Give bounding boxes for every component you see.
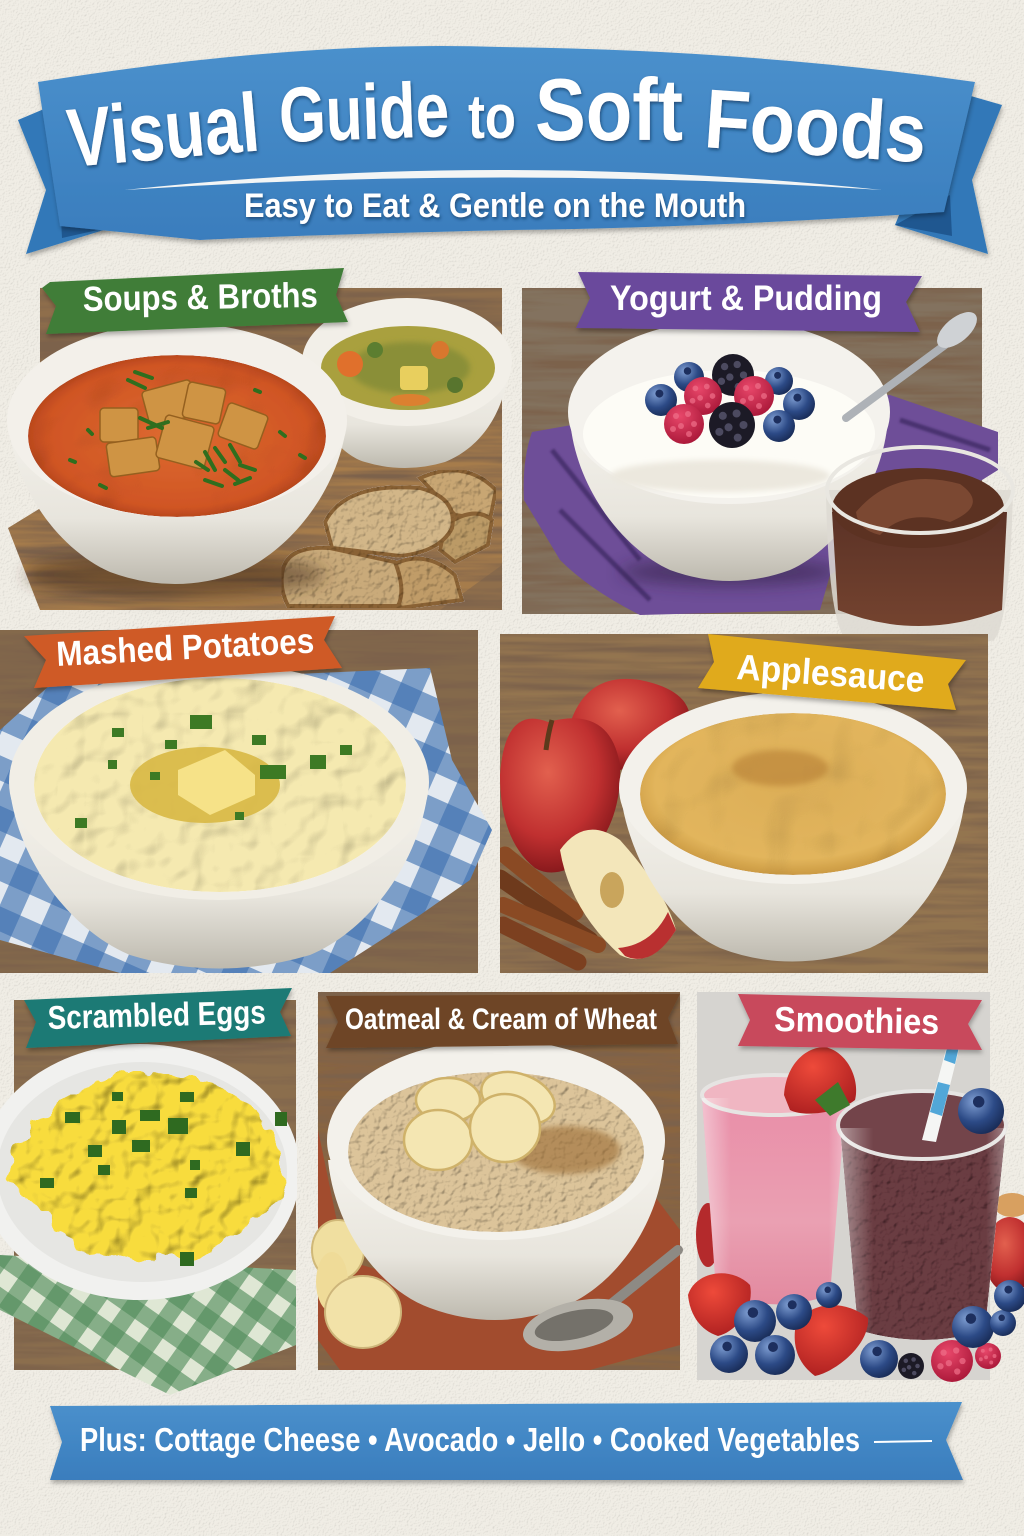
apples bbox=[500, 679, 690, 872]
bowl of yogurt and berries bbox=[568, 320, 890, 586]
bottom banner bbox=[50, 1402, 963, 1480]
pink smoothie glass bbox=[702, 1075, 846, 1304]
cinnamon sticks bbox=[500, 855, 598, 962]
label: yogurt and pudding bbox=[576, 272, 922, 332]
label: mashed potatoes: Mashed Potatoes bbox=[55, 622, 315, 674]
label: applesauce bbox=[698, 634, 966, 710]
title words: Foods bbox=[702, 71, 930, 180]
label: soups and broths: Soups & Broths bbox=[82, 276, 318, 319]
apple slice bbox=[560, 830, 676, 959]
berries at front bbox=[688, 1273, 1024, 1382]
title words: Soft bbox=[535, 60, 683, 159]
striped straw bbox=[922, 1034, 962, 1142]
subtitle: Easy to Eat & Gentle on the Mouth bbox=[244, 187, 746, 225]
bottom banner: Plus: Cottage Cheese • Avocado • Jello • Cooked Vegetables bbox=[80, 1421, 860, 1458]
panel: yogurt and pudding bbox=[522, 288, 1013, 651]
eggs bbox=[8, 1073, 287, 1266]
strawberry on glass bbox=[784, 1047, 856, 1116]
label: yogurt and pudding: Yogurt & Pudding bbox=[610, 279, 882, 318]
label: scrambled eggs bbox=[24, 988, 292, 1048]
panel: applesauce bbox=[500, 634, 988, 973]
banner tails bbox=[18, 90, 1002, 254]
large bowl of tomato soup bbox=[7, 323, 347, 597]
banner fold shadows bbox=[60, 195, 952, 238]
bowl of applesauce bbox=[619, 692, 967, 962]
panel: soups and broths bbox=[7, 288, 512, 610]
title words: Visual bbox=[63, 76, 263, 185]
white plate bbox=[0, 1044, 300, 1300]
side apples bbox=[696, 1193, 1024, 1293]
banner body bbox=[38, 46, 975, 240]
glass of chocolate pudding bbox=[826, 447, 1013, 651]
label: mashed potatoes bbox=[24, 616, 342, 688]
label: applesauce: Applesauce bbox=[735, 646, 926, 700]
label: soups and broths bbox=[42, 268, 348, 334]
blueberry on smoothie bbox=[958, 1088, 1004, 1134]
label: oatmeal and cream of wheat bbox=[326, 994, 680, 1048]
banana slices on table bbox=[312, 1220, 401, 1348]
title words bbox=[63, 60, 930, 185]
cutting board bbox=[8, 420, 502, 610]
panel: oatmeal and cream of wheat bbox=[312, 992, 680, 1370]
dark berry smoothie glass bbox=[838, 1091, 1006, 1340]
title banner bbox=[18, 46, 1002, 254]
panel: mashed potatoes bbox=[0, 630, 492, 973]
purple napkin bbox=[524, 395, 998, 615]
spoon bbox=[518, 1250, 678, 1360]
title words: Guide bbox=[278, 65, 450, 159]
label: smoothies: Smoothies bbox=[774, 1000, 940, 1042]
underline swoosh bbox=[125, 170, 882, 190]
label: smoothies bbox=[738, 994, 982, 1050]
small bowl of broth bbox=[302, 298, 512, 468]
croutons and herbs bbox=[100, 379, 269, 477]
title words: to bbox=[468, 83, 516, 152]
bowl of mashed potatoes bbox=[9, 664, 429, 968]
green checked towel bbox=[0, 1255, 296, 1395]
bowl of oatmeal bbox=[327, 1040, 665, 1320]
panel: smoothies bbox=[688, 992, 1024, 1382]
rust cloth bbox=[318, 1130, 680, 1370]
panel: scrambled eggs bbox=[0, 1000, 300, 1395]
bread slices bbox=[282, 470, 496, 608]
checked blue cloth bbox=[0, 668, 492, 973]
spoon bbox=[846, 305, 983, 418]
label: scrambled eggs: Scrambled Eggs bbox=[47, 993, 266, 1036]
label: oatmeal and cream of wheat: Oatmeal & Cream of Wheat bbox=[345, 1003, 657, 1036]
